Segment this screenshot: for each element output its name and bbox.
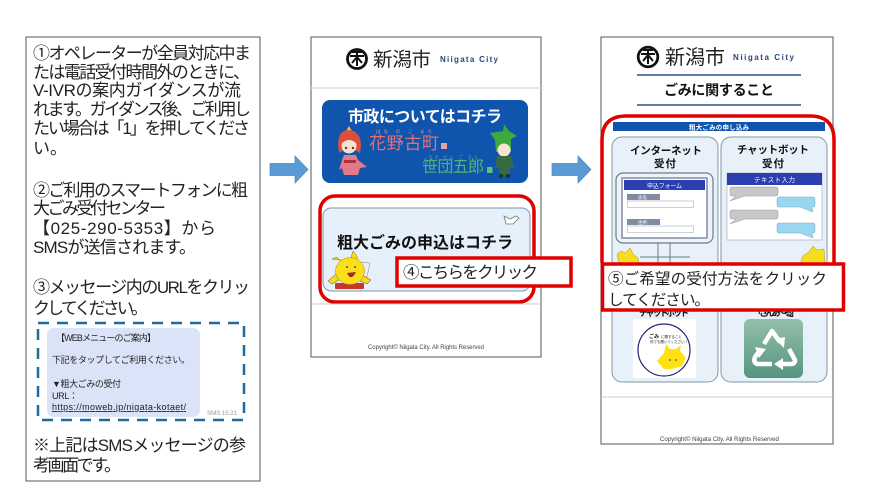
panel: instructions xyxy=(26,37,260,481)
logo: Niigata City: Niigata City xyxy=(733,53,795,62)
SMS message sample: URL： xyxy=(52,391,78,401)
card: internet application: インターネット xyxy=(630,145,702,157)
callout: step 5 xyxy=(602,264,844,310)
logo: Niigata City: Niigata City xyxy=(440,55,499,64)
banner: city government: はな の こ まち xyxy=(376,128,432,135)
SMS message sample xyxy=(38,323,244,420)
icon: chatbot badge: に関すること xyxy=(661,334,682,339)
arrow: to screen 1 xyxy=(270,156,308,183)
icon: mascot peeking xyxy=(800,246,825,264)
text block: note: 考画面です。 xyxy=(33,456,121,475)
text block: step 2: SMSが送信されます。 xyxy=(33,238,196,257)
text block: step 3: ③メッセージ内のURLをクリッ xyxy=(33,278,250,297)
callout: step 4: ④こちらをクリック xyxy=(403,263,538,282)
SMS message sample: 【WEBメニューのご案内】 xyxy=(56,332,156,343)
icon: mascot xyxy=(328,251,371,289)
banner: city government: 花野古町 xyxy=(369,134,439,153)
text block: step 3 xyxy=(33,278,250,318)
banner: city government: ささ だん ご ろう xyxy=(428,154,478,161)
SMS message sample: ▼粗大ごみの受付 xyxy=(52,378,121,389)
logo: Niigata City xyxy=(638,46,795,69)
icon: bird xyxy=(504,216,519,224)
logo: Niigata City: 新潟市 xyxy=(373,49,431,71)
text block: step 2: 大ごみ受付センター xyxy=(33,199,166,218)
text block: step 1: れます。ガイダンス後、ご利用し xyxy=(33,100,251,119)
icon: girl character xyxy=(338,126,367,175)
text block: step 1 xyxy=(33,44,251,158)
icon: chatbot badge: ごみ xyxy=(649,333,659,340)
card: bulky waste application: 粗大ごみの申込はコチラ xyxy=(337,233,513,252)
callout: step 5: してください。 xyxy=(608,291,710,309)
highlight: red frame xyxy=(320,196,534,302)
text block: step 1: い。 xyxy=(33,139,67,158)
text block: step 2 xyxy=(33,181,248,257)
logo: Niigata City: 新潟市 xyxy=(665,46,725,69)
panel: waste screen xyxy=(601,37,834,444)
text block: step 1: ①オペレーターが全員対応中ま xyxy=(33,44,251,63)
callout: step 4 xyxy=(397,258,571,286)
card: chatbot application: 受付 xyxy=(762,157,784,170)
icon: boy character xyxy=(490,124,517,178)
icon: form monitor xyxy=(616,173,713,263)
banner: city government: 笹団五郎 xyxy=(422,158,484,176)
text block: step 3: クしてください。 xyxy=(33,299,148,318)
SMS message sample: 下記をタップしてご利用ください。 xyxy=(52,354,190,365)
logo: Niigata City xyxy=(348,49,499,71)
icon: form monitor: 氏名 xyxy=(638,194,647,201)
copyright: Copyright© Niigata City. All Rights Reserved xyxy=(368,344,484,351)
panel: city top screen xyxy=(311,37,541,357)
heading: ごみに関すること xyxy=(664,82,774,98)
card: internet application: 受付 xyxy=(654,157,676,170)
card: internet application xyxy=(612,137,718,382)
section bar: 粗大ごみの申し込み xyxy=(689,122,750,132)
highlight: red frame xyxy=(602,116,834,263)
SMS message sample: SMS 15:21 xyxy=(207,410,237,417)
text block: step 1: V-IVRの案内ガイダンスが流 xyxy=(33,81,241,100)
icon: mascot peeking xyxy=(617,248,639,264)
arrow: to screen 2 xyxy=(552,156,591,183)
icon: chat window: テキスト入力 xyxy=(754,175,795,184)
icon: recycling app xyxy=(744,319,803,378)
icon: chatbot badge: 何でも聞いてください！ xyxy=(650,339,688,344)
text block: step 1: たい場合は「1」を押してくださ xyxy=(33,119,250,138)
text block: step 1: たは電話受付時間外のときに、 xyxy=(33,63,250,82)
icon: chatbot badge xyxy=(633,319,696,378)
icon: form monitor: 住所 xyxy=(638,219,647,226)
banner: city government: 市政についてはコチラ xyxy=(348,107,502,126)
label: recycling: 「さんあ～る」 xyxy=(753,308,799,318)
text block: step 2: 【025-290-5353】から xyxy=(33,219,216,238)
card: chatbot application xyxy=(721,137,827,382)
callout: step 5: ⑤ご希望の受付方法をクリック xyxy=(608,270,827,288)
text block: step 2: ②ご利用のスマートフォンに粗 xyxy=(33,181,248,200)
SMS message sample: https://moweb.jp/nigata-kotaet/ xyxy=(52,402,186,412)
icon: chat window xyxy=(727,173,822,240)
text block: note: ※上記はSMSメッセージの参 xyxy=(33,436,246,455)
card: bulky waste application xyxy=(323,208,530,291)
section bar xyxy=(613,122,825,132)
text block: note xyxy=(33,436,246,475)
icon: form monitor: 申込フォーム xyxy=(647,182,682,190)
card: chatbot application: チャットボット xyxy=(737,144,809,156)
banner: city government xyxy=(322,100,528,183)
copyright: Copyright© Niigata City. All Rights Reserved xyxy=(660,436,780,443)
label: chatbot: チャットボット xyxy=(639,307,689,318)
